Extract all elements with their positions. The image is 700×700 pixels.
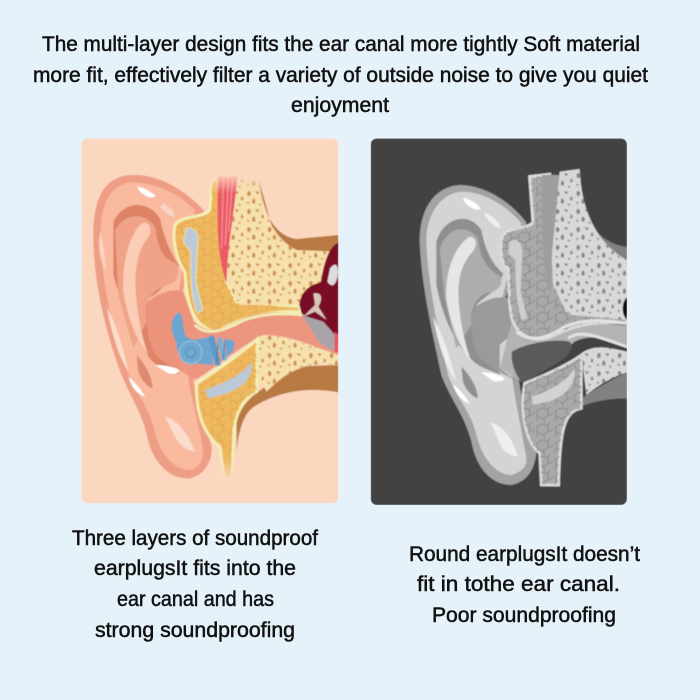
title (33, 33, 648, 117)
title: enjoyment (291, 94, 389, 117)
cross-section: upper bone (228, 182, 330, 306)
grey canal outline (516, 321, 627, 338)
upper cartilage (183, 228, 203, 313)
cross-section: grey upper fat layer (501, 174, 627, 339)
inner ear and eardrum (299, 242, 338, 352)
icon: blue earplug (172, 312, 234, 367)
lower cartilage (205, 362, 252, 398)
inner ear spot (623, 297, 627, 320)
left caption: ear canal and has (117, 588, 274, 611)
left caption (72, 527, 318, 642)
right caption: Round earplugsIt doesn’t (409, 543, 640, 566)
cross-section: upper fat layer (174, 178, 300, 332)
title: more fit, effectively filter a variety of outside noise to give you quiet (33, 64, 648, 87)
cross-section: grey brown tissue (582, 232, 627, 406)
grey lower bone (581, 347, 627, 395)
panel: three-layer earplug in ear (81, 138, 338, 503)
left caption: Three layers of soundproof (72, 527, 318, 550)
title: The multi-layer design fits the ear canal more tightly Soft material (42, 33, 640, 56)
top fade (210, 176, 262, 192)
cross-section: brown tissue (237, 178, 338, 452)
outer ear (93, 175, 212, 478)
ear canal (178, 312, 338, 380)
grey lower fat layer (523, 355, 581, 485)
grey canal wall (500, 323, 627, 383)
lower fat layer (197, 339, 257, 478)
bottom fade (222, 460, 234, 480)
muscle (217, 177, 237, 283)
cross-section: grey upper bone (552, 169, 627, 320)
outer ear grey (420, 185, 536, 485)
grey upper cartilage (508, 240, 527, 320)
panel: round earplug does not fit (371, 138, 627, 505)
right caption: fit in tothe ear canal. (417, 573, 620, 596)
right caption: Poor soundproofing (432, 604, 616, 627)
left caption: strong soundproofing (95, 619, 295, 642)
left caption: earplugsIt fits into the (94, 557, 296, 580)
dark ear canal (512, 341, 572, 383)
lower bone (257, 336, 338, 392)
cross-section: grey muscle (542, 175, 560, 295)
grey lower cartilage (531, 368, 575, 405)
right caption (409, 543, 640, 627)
